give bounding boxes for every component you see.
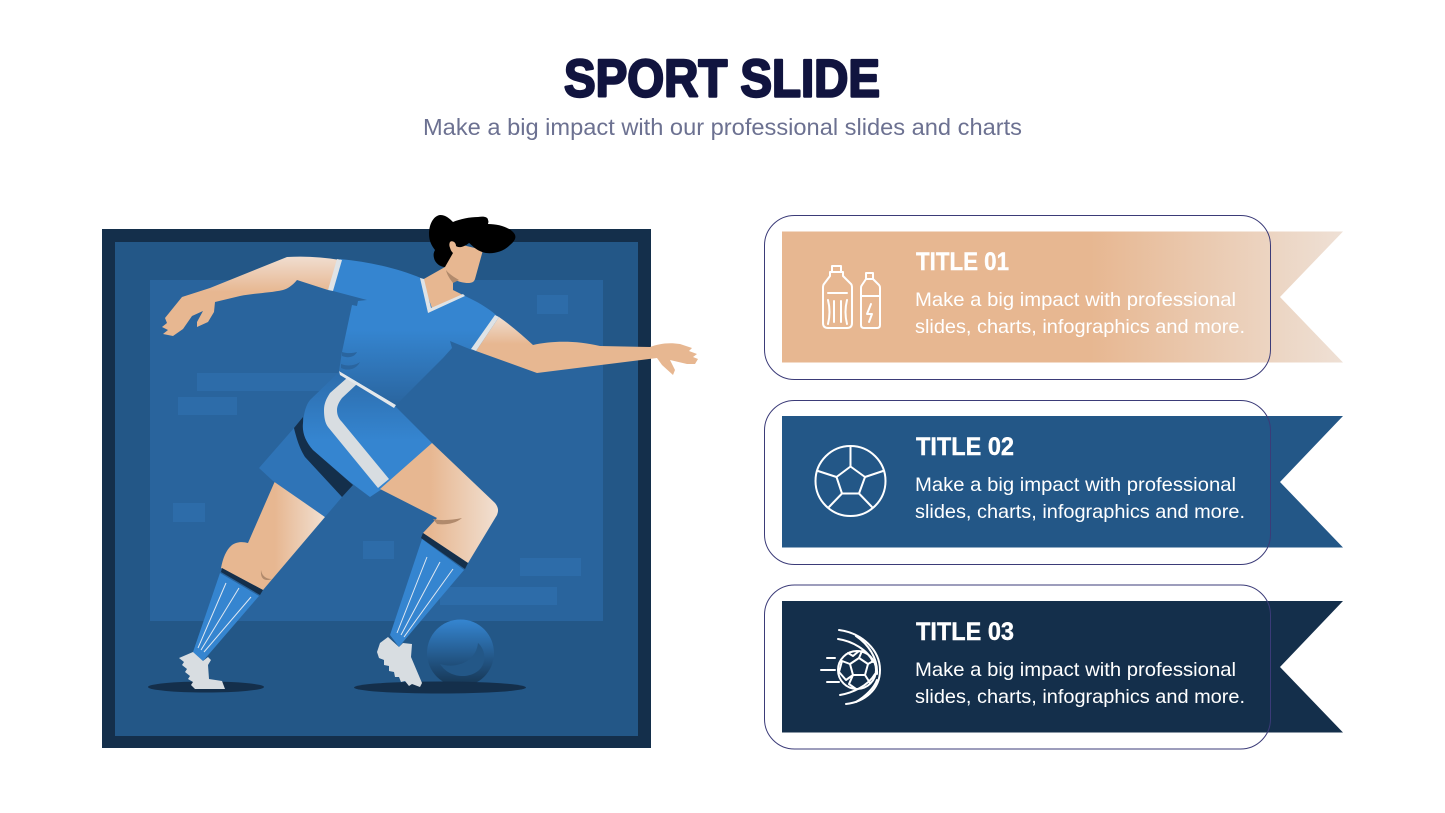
collar xyxy=(420,278,465,313)
text: description 01: slides, charts, infographics and more. xyxy=(915,317,1245,338)
ribbon 2 xyxy=(782,416,1343,548)
text: description 03: Make a big impact with professional xyxy=(915,660,1236,681)
neck shadow xyxy=(446,270,459,283)
icon: bottles xyxy=(823,266,880,328)
illustration background panel xyxy=(102,229,651,748)
left arm xyxy=(162,257,342,336)
shirt xyxy=(333,259,496,405)
right arm xyxy=(471,315,698,375)
text: description 03 xyxy=(915,660,1245,708)
shirt shadow folds xyxy=(341,352,360,370)
subtitle: Make a big impact with our professional slides and charts xyxy=(423,114,1022,140)
card outlines xyxy=(764,216,1270,749)
text: description 03: slides, charts, infographics and more. xyxy=(915,687,1245,708)
heading: title 01: TITLE 01 xyxy=(916,248,1009,276)
shorts xyxy=(259,371,432,517)
heading: title 02: TITLE 02 xyxy=(916,433,1014,461)
text: description 02: slides, charts, infographics and more. xyxy=(915,502,1245,523)
player xyxy=(162,215,698,689)
football xyxy=(427,620,494,686)
hair xyxy=(429,215,515,267)
icon: soccer ball xyxy=(816,446,886,516)
text: description 01 xyxy=(915,290,1245,338)
back leg xyxy=(179,481,325,689)
text: description 02: Make a big impact with professional xyxy=(915,475,1236,496)
ear xyxy=(449,241,456,250)
heading: title 03: TITLE 03 xyxy=(916,618,1014,646)
icon: flying ball xyxy=(821,630,880,704)
front leg xyxy=(377,443,498,687)
title: SPORT SLIDE xyxy=(564,50,880,108)
text: description 02 xyxy=(915,475,1245,523)
ribbon 1 xyxy=(782,232,1343,362)
neck and face xyxy=(422,242,483,308)
text: description 01: Make a big impact with professional xyxy=(915,290,1236,311)
ground shadows xyxy=(148,682,526,694)
ribbon 3 xyxy=(782,601,1343,732)
